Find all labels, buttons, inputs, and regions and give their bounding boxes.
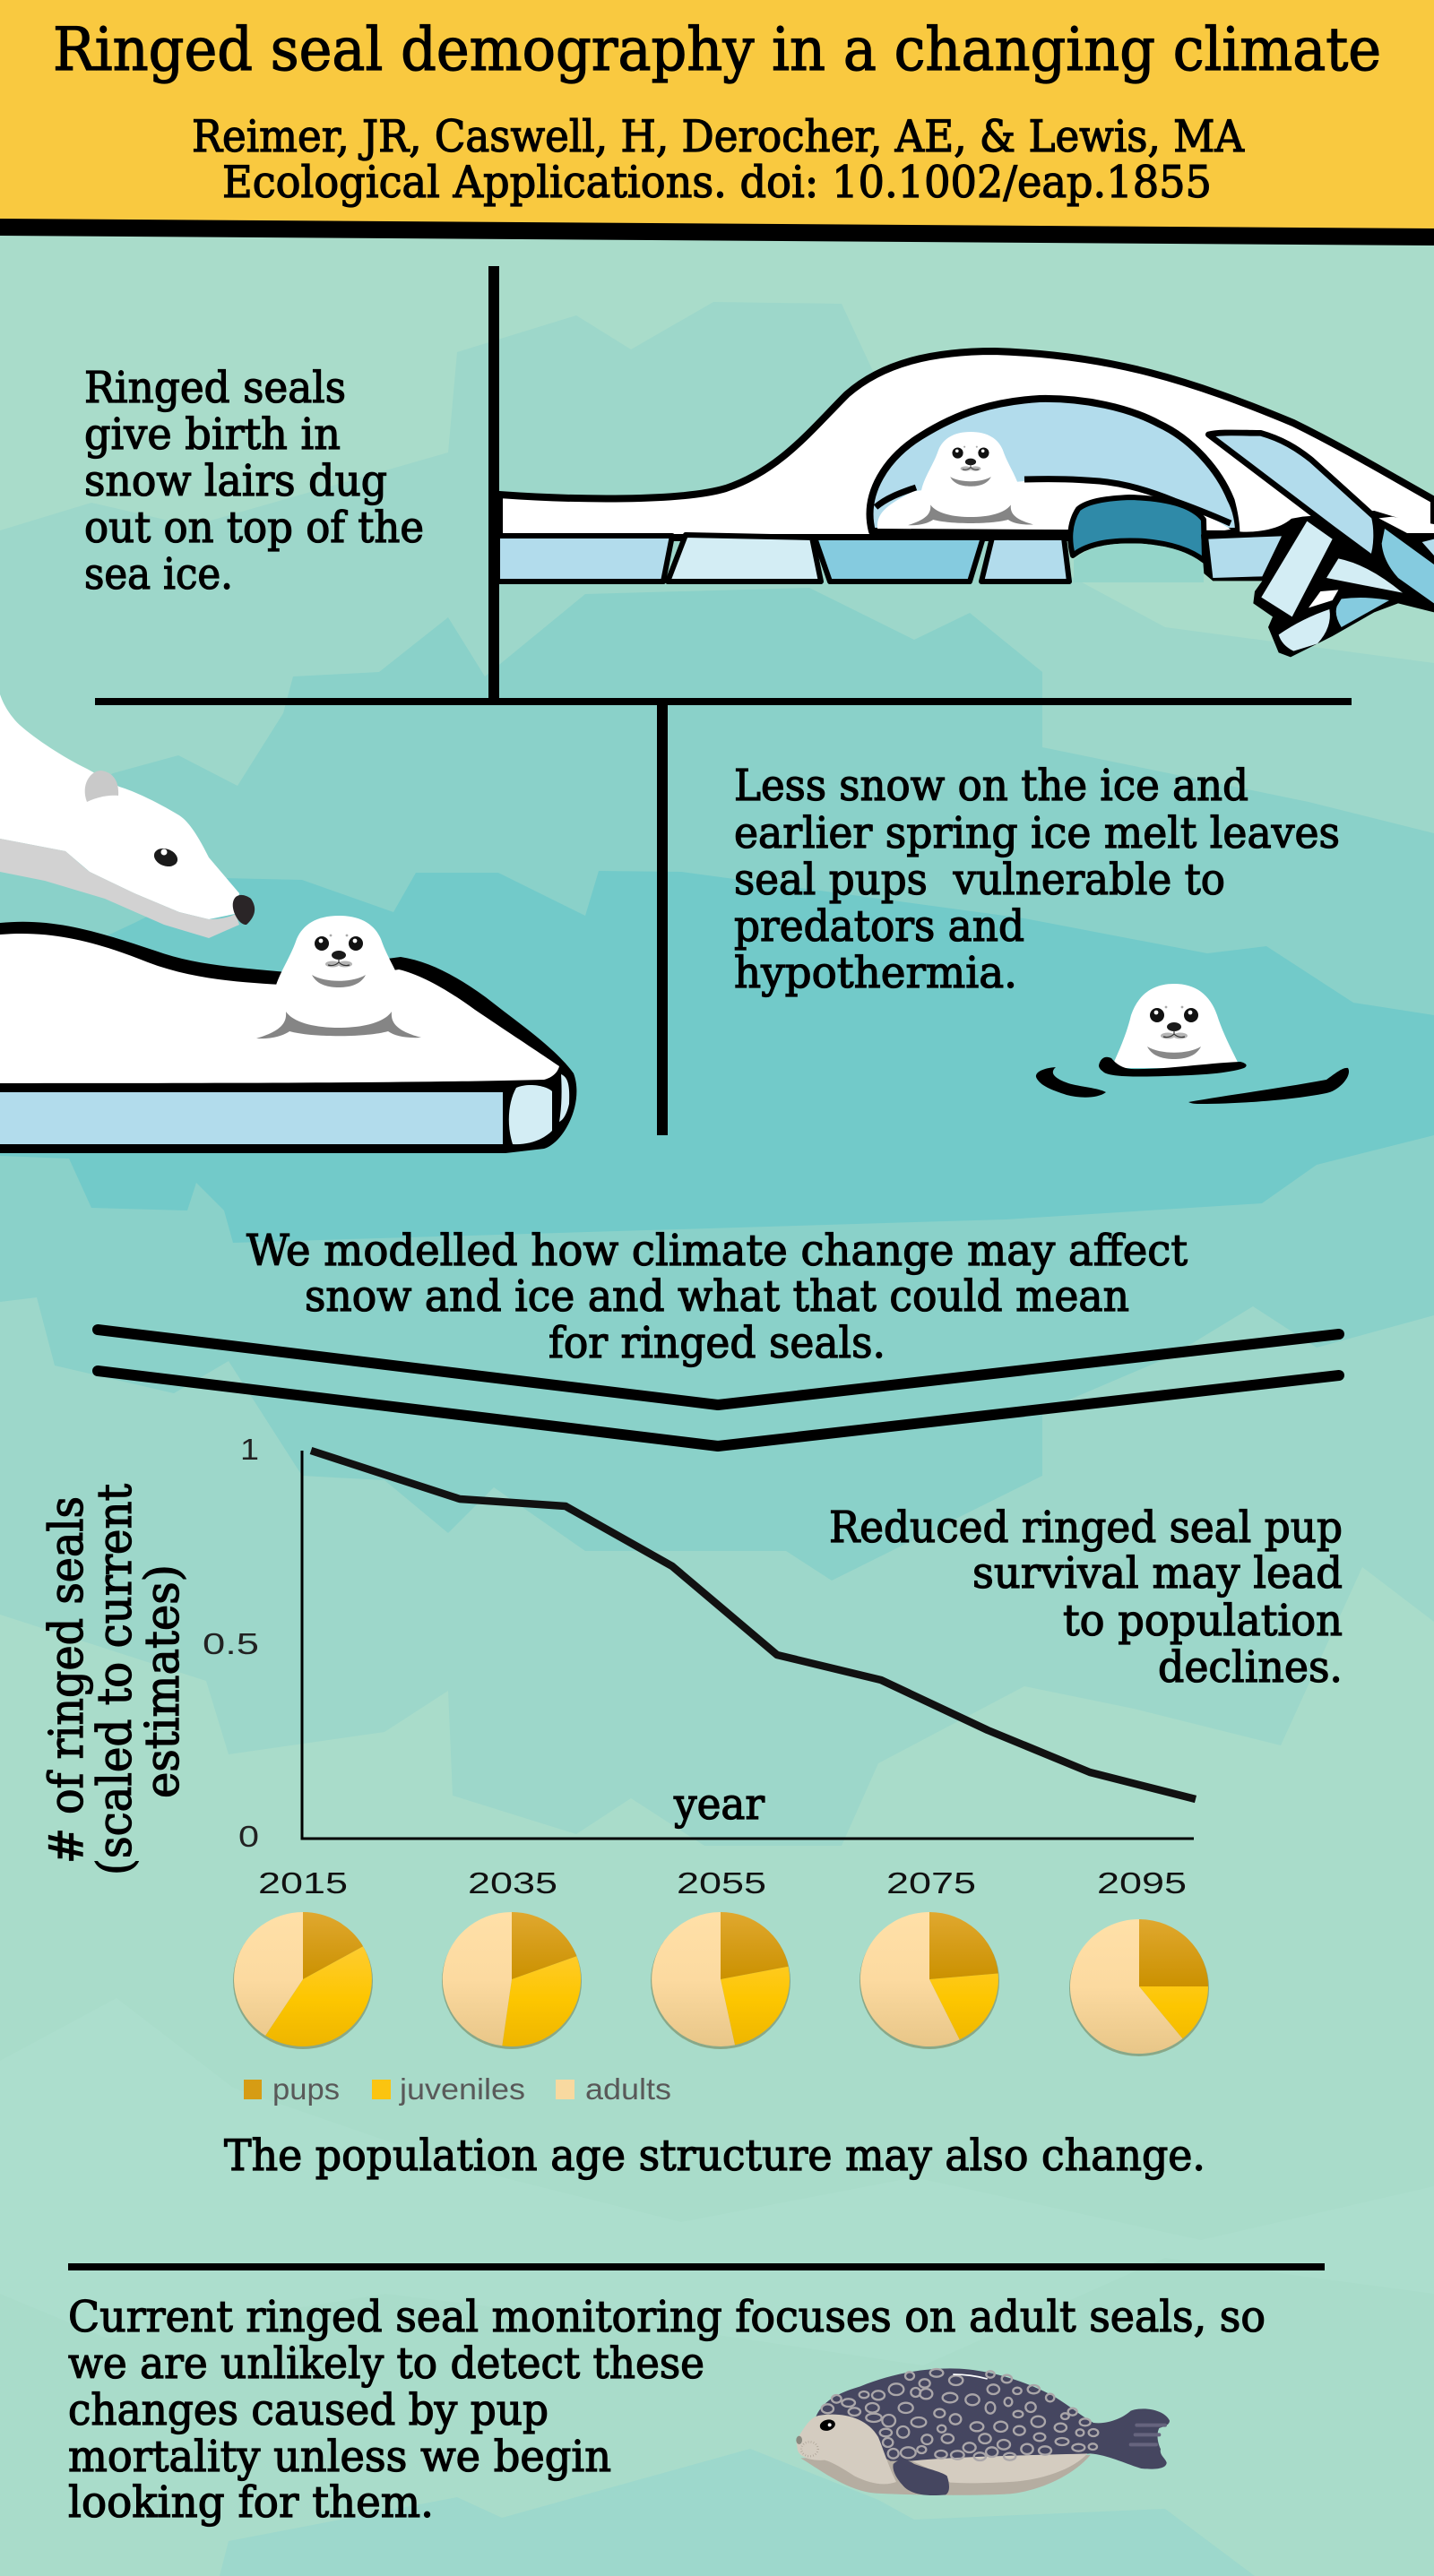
divider lines at top section: [95, 266, 1352, 1135]
text: less snow: seal pups vulnerable to: [734, 855, 1225, 905]
pie legend: pups: [272, 2072, 340, 2106]
pie legend: [244, 2072, 671, 2106]
y axis title: # of ringed seals: [40, 1496, 94, 1864]
text: monitoring: looking for them.: [68, 2477, 434, 2528]
illustration: polar bear: [0, 694, 255, 938]
illustration: adult ringed seal: [796, 2368, 1170, 2495]
year labels: 2015: [258, 1866, 348, 1900]
text: birth in snow lairs: Ringed seals: [84, 363, 346, 413]
text: birth in snow lairs: [84, 363, 424, 599]
text: age structure: The population age structure may also change.: [224, 2131, 1205, 2181]
text: birth in snow lairs: sea ice.: [84, 549, 233, 599]
pie 2035: [442, 1912, 582, 2049]
text: monitoring: changes caused by pup: [68, 2385, 549, 2435]
fur rings: [822, 2369, 1098, 2460]
line chart: population decline: [40, 1433, 1196, 1900]
y tick labels: [203, 1433, 259, 1853]
authors and citation: [192, 111, 1245, 208]
illustration: seal pup in water: [1036, 984, 1349, 1104]
text: birth in snow lairs: snow lairs dug: [84, 456, 387, 506]
text: reduced survival: declines.: [1158, 1642, 1343, 1693]
pie legend: juveniles: [399, 2072, 525, 2106]
y tick labels: 0: [238, 1820, 259, 1853]
text: we modelled: [246, 1226, 1188, 1368]
x axis title: year: [673, 1779, 765, 1830]
text: we modelled: for ringed seals.: [549, 1318, 885, 1368]
y axis title: [40, 1484, 190, 1875]
text: monitoring: we are unlikely to detect these: [68, 2339, 704, 2389]
year labels: 2035: [468, 1866, 557, 1900]
text: birth in snow lairs: give birth in: [84, 409, 341, 460]
broken ice pieces: [1201, 433, 1434, 657]
y tick labels: 1: [240, 1433, 259, 1466]
pie 2075: [860, 1912, 999, 2049]
divider: [68, 2263, 1325, 2270]
text: less snow: Less snow on the ice and: [734, 761, 1248, 811]
text: reduced survival: survival may lead: [972, 1548, 1343, 1598]
text: monitoring: [68, 2292, 1266, 2528]
text: reduced survival: [829, 1503, 1343, 1693]
population line: [311, 1451, 1196, 1799]
authors and citation: Ecological Applications. doi: 10.1002/eap.1855: [222, 157, 1212, 208]
text: less snow: earlier spring ice melt leaves: [734, 808, 1340, 858]
year labels: 2095: [1097, 1866, 1187, 1900]
y axis title: estimates): [136, 1564, 190, 1798]
text: we modelled: snow and ice and what that could mean: [305, 1271, 1129, 1322]
year labels: 2055: [677, 1866, 766, 1900]
text: reduced survival: to population: [1063, 1596, 1343, 1646]
pie 2055: [651, 1912, 790, 2049]
arrow: double chevron: [98, 1330, 1339, 1446]
text: less snow: [734, 761, 1340, 998]
y tick labels: 0.5: [203, 1627, 259, 1660]
y axis title: (scaled to current: [89, 1484, 143, 1875]
authors and citation: Reimer, JR, Caswell, H, Derocher, AE, & Lewis, MA: [192, 111, 1245, 162]
ice band: [497, 535, 1069, 582]
text: we modelled: We modelled how climate change may affect: [246, 1226, 1188, 1276]
pie 2095: [1069, 1919, 1209, 2056]
illustration: snow lair: [497, 351, 1434, 657]
text: birth in snow lairs: out on top of the: [84, 503, 424, 553]
seal pup in lair: [908, 432, 1033, 525]
text: less snow: predators and: [734, 901, 1024, 952]
seal pup on floe: [256, 916, 421, 1038]
tunnel: [1070, 497, 1205, 561]
pie 2015: [233, 1912, 373, 2049]
text: monitoring: mortality unless we begin: [68, 2432, 611, 2482]
text: reduced survival: Reduced ringed seal pup: [829, 1503, 1343, 1553]
text: monitoring: Current ringed seal monitoring focuses on adult seals, so: [68, 2292, 1266, 2342]
text: less snow: hypothermia.: [734, 948, 1017, 998]
year labels: [258, 1866, 1187, 1900]
header banner: [0, 0, 1434, 246]
water ripples: [1036, 1057, 1349, 1104]
pie legend: adults: [585, 2072, 671, 2106]
illustration: ice floe with seal pup: [0, 916, 576, 1153]
year labels: 2075: [886, 1866, 976, 1900]
pie charts: age structure: [233, 1912, 1209, 2056]
title: Ringed seal demography in a changing climate: [53, 15, 1381, 84]
